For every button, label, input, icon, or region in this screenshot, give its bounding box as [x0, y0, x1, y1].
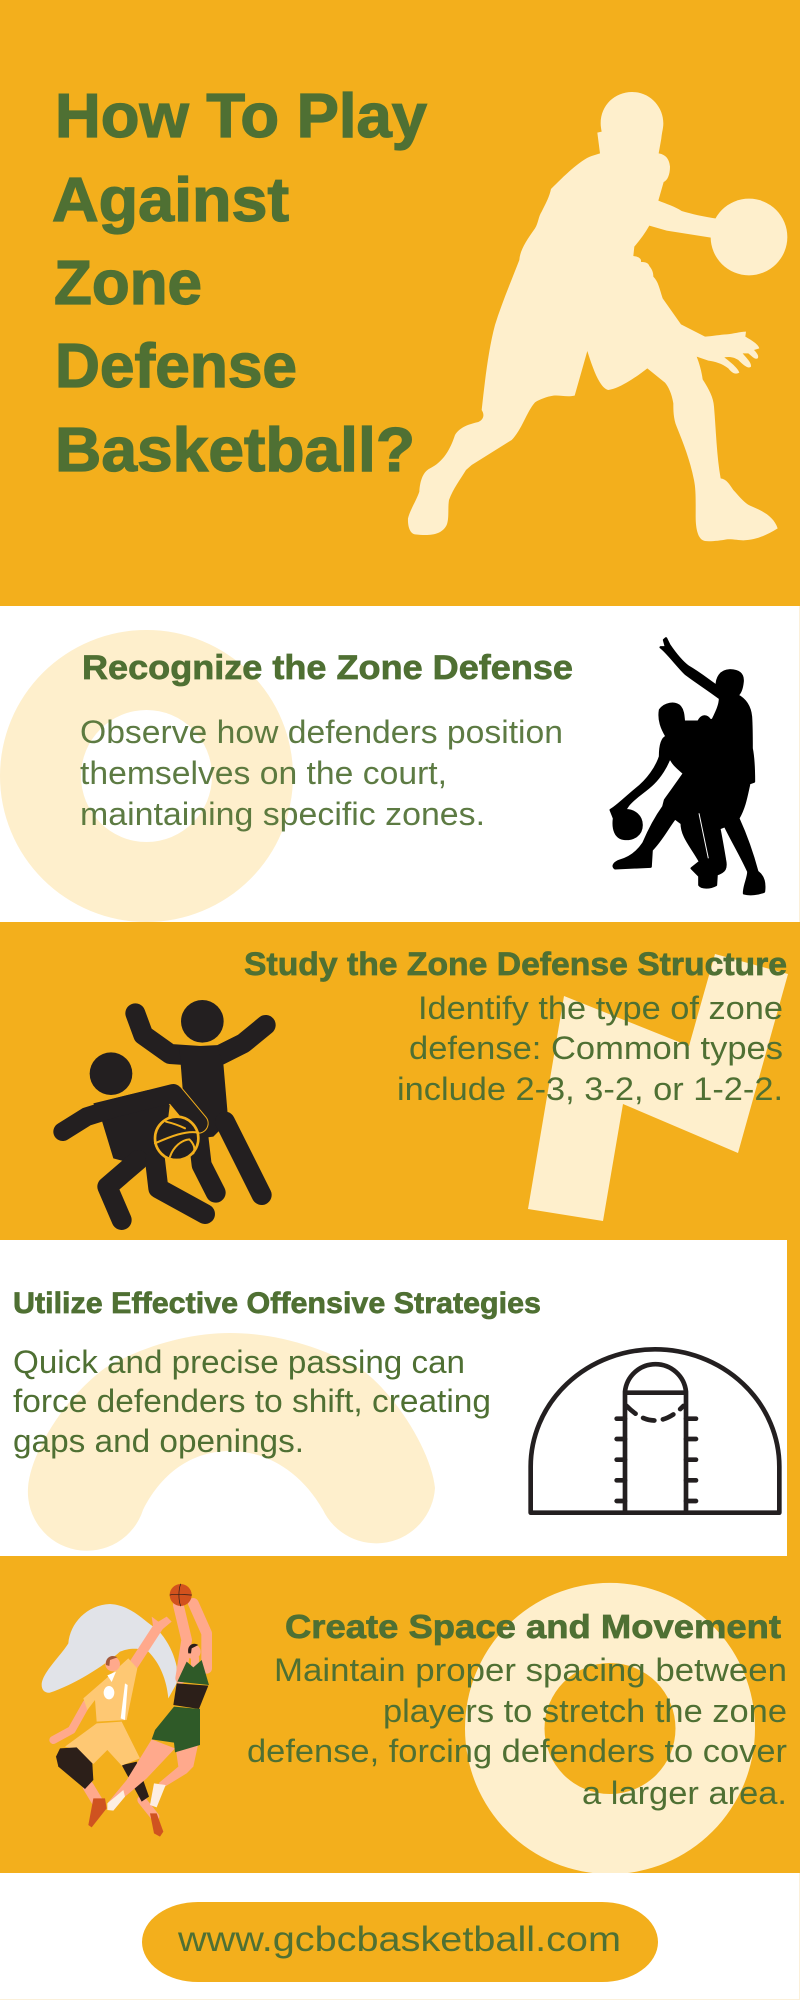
text block: defense: Common types	[409, 1030, 783, 1066]
illustration: two jumping players	[42, 1584, 209, 1837]
text block: Quick and precise passing can	[13, 1344, 465, 1380]
text block: include 2-3, 3-2, or 1-2-2.	[397, 1071, 783, 1107]
decorative cream ring	[465, 1583, 755, 1874]
icon: half court diagram	[531, 1349, 779, 1513]
heading: Study the Zone Defense Structure	[244, 946, 787, 982]
panel: create space and movement	[0, 1556, 800, 1874]
decorative cream zigzag	[528, 954, 788, 1221]
panel: website footer	[0, 1873, 799, 1999]
icon: dribbling player silhouette	[408, 92, 787, 541]
text block	[247, 1652, 787, 1811]
text block: defense, forcing defenders to cover	[247, 1733, 787, 1769]
text block: themselves on the court,	[80, 755, 447, 791]
title: Basketball?	[55, 416, 415, 485]
icon: two players with ball	[63, 1000, 266, 1220]
decorative cream arch	[28, 1333, 435, 1551]
title: Zone	[54, 249, 202, 318]
text block: maintaining specific zones.	[80, 796, 485, 832]
text block	[80, 714, 563, 832]
icon: two players silhouette	[611, 638, 764, 894]
text block: Maintain proper spacing between	[274, 1652, 787, 1688]
website pill: www.gcbcbasketball.com	[177, 1920, 621, 1959]
website pill	[142, 1902, 658, 1982]
title: How To Play	[55, 82, 428, 151]
heading: Utilize Effective Offensive Strategies	[13, 1287, 541, 1320]
text block: Identify the type of zone	[418, 990, 783, 1026]
text block	[397, 990, 783, 1107]
decorative cream ring	[0, 630, 293, 922]
text block: Observe how defenders position	[80, 714, 563, 750]
panel: utilize effective offensive strategies	[0, 1240, 800, 1556]
text block: a larger area.	[582, 1775, 787, 1811]
heading: Create Space and Movement	[285, 1608, 781, 1645]
panel: recognize the zone defense	[0, 606, 799, 922]
title	[52, 82, 428, 485]
text block: force defenders to shift, creating	[13, 1383, 491, 1419]
title: Against	[52, 166, 289, 235]
text block: players to stretch the zone	[383, 1693, 787, 1729]
panel: title header	[0, 0, 800, 606]
text block: gaps and openings.	[13, 1423, 304, 1459]
panel: study the zone defense structure	[0, 922, 800, 1240]
title: Defense	[55, 332, 297, 401]
heading: Recognize the Zone Defense	[82, 649, 573, 687]
text block	[13, 1344, 491, 1459]
